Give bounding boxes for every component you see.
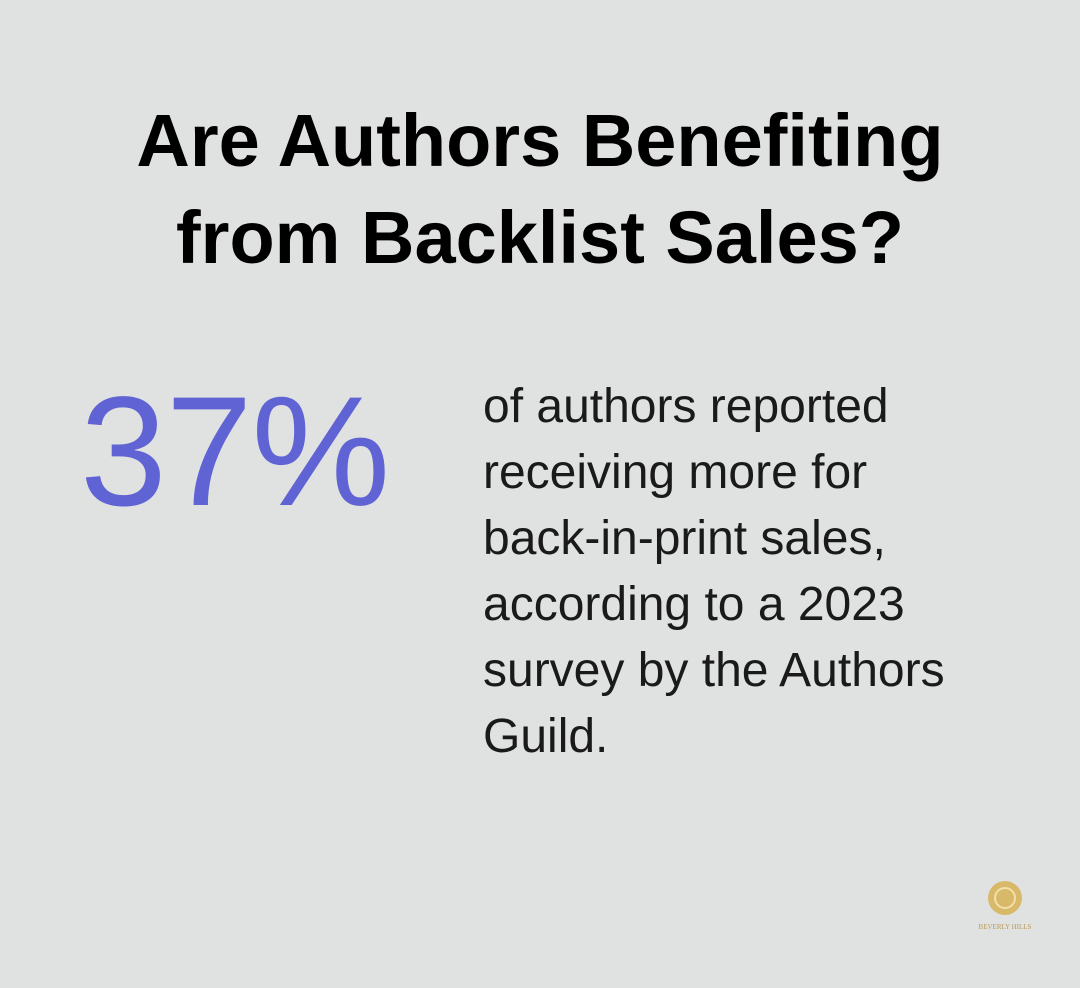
title: from Backlist Sales? — [176, 196, 904, 279]
description text: back-in-print sales, — [483, 512, 886, 565]
description text: according to a 2023 — [483, 578, 905, 631]
description text: of authors reported — [483, 380, 889, 433]
description text — [483, 380, 945, 763]
title: Are Authors Benefiting — [136, 99, 944, 182]
title — [136, 99, 944, 279]
big statistic: 37% — [80, 365, 389, 539]
description text: receiving more for — [483, 446, 867, 499]
description text: Guild. — [483, 710, 608, 763]
logo: BEVERLY HILLS — [979, 923, 1031, 931]
description text: survey by the Authors — [483, 644, 945, 697]
logo — [978, 881, 1031, 931]
